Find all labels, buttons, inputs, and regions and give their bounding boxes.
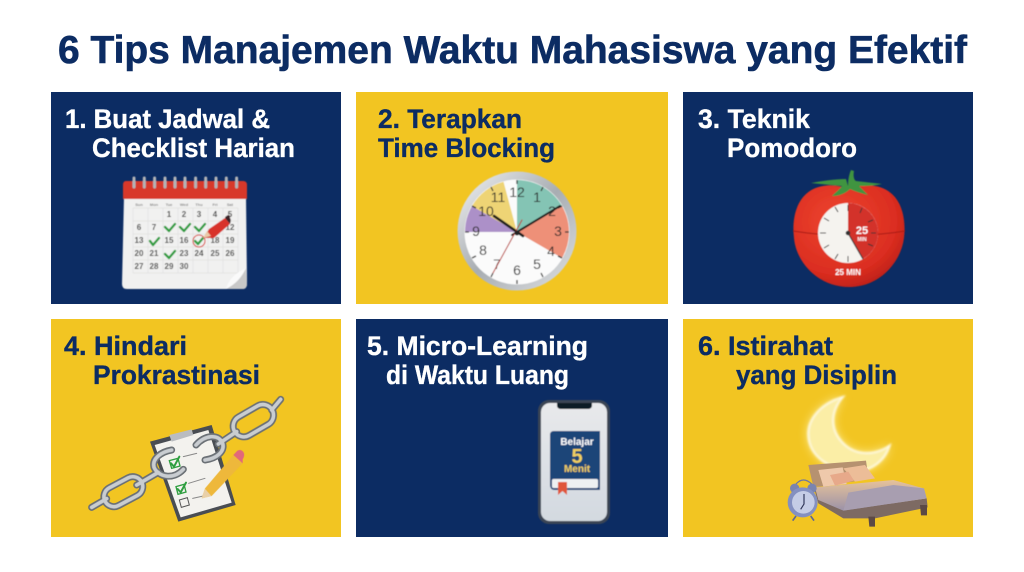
icon: smartphone with book: 5 — [571, 446, 583, 468]
panel 4 heading — [64, 331, 260, 390]
calendar dates: 18 — [211, 236, 220, 245]
bed frame — [813, 485, 928, 518]
calendar dates: 30 — [180, 262, 189, 271]
panel 5 background — [356, 319, 668, 537]
calendar dates: 28 — [150, 262, 159, 271]
calendar checkmarks — [150, 224, 205, 258]
icon: smartphone with book — [538, 400, 610, 524]
panel 6 heading: 6. Istirahat — [698, 331, 833, 361]
calendar weekday labels: Wed — [180, 202, 189, 207]
panel 6 heading — [698, 331, 897, 390]
panel 5 heading — [367, 331, 588, 390]
clock numerals: 4 — [547, 243, 555, 259]
calendar red marker — [203, 215, 231, 238]
timer label: 25 — [856, 225, 868, 237]
panel: 1 jadwal dan checklist — [51, 92, 341, 304]
panel 4 background — [51, 319, 341, 537]
book text: Belajar — [560, 437, 594, 448]
clock numerals: 3 — [554, 223, 562, 239]
panel 6 background — [683, 319, 973, 537]
calendar page curl — [226, 268, 247, 289]
clock colour wedges — [517, 180, 562, 232]
title: 6 Tips Manajemen Waktu Mahasiswa yang Efektif — [58, 29, 968, 72]
panel 4 heading: 4. Hindari — [64, 331, 187, 361]
panel 6 heading: yang Disiplin — [736, 360, 897, 390]
icon: wall clock — [458, 172, 576, 290]
panel 2 heading — [378, 104, 555, 163]
calendar dates: 27 — [135, 262, 144, 271]
panel 5 heading: 5. Micro-Learning — [367, 331, 588, 361]
bed pillows — [818, 467, 847, 487]
calendar dates — [135, 210, 235, 271]
calendar dates: 29 — [165, 262, 174, 271]
clock numerals: 12 — [509, 184, 525, 200]
calendar weekday labels: Fri — [212, 202, 218, 207]
calendar dates: 3 — [197, 210, 202, 219]
panel 2 heading: 2. Terapkan — [378, 104, 522, 134]
calendar dates: 25 — [211, 249, 220, 258]
panel: 6 istirahat — [683, 319, 973, 537]
panel 2 heading: Time Blocking — [378, 133, 555, 163]
timer dial — [818, 203, 878, 263]
calendar dates: 5 — [228, 210, 233, 219]
calendar dates: 23 — [180, 249, 189, 258]
clock numerals: 6 — [513, 262, 521, 278]
calendar dates: 20 — [135, 249, 144, 258]
clock numerals: 5 — [533, 256, 541, 272]
clipboard — [150, 425, 236, 522]
calendar dates: 24 — [195, 249, 204, 258]
clock minute ticks — [465, 180, 569, 284]
clock hands — [493, 206, 560, 273]
panel 1 heading — [65, 104, 295, 163]
chain — [92, 399, 281, 510]
panel 2 background — [356, 92, 668, 304]
clock numerals: 11 — [491, 189, 505, 205]
pencil — [202, 450, 244, 498]
clock numerals: 8 — [479, 242, 487, 258]
icon: calendar — [122, 178, 247, 289]
calendar grid — [133, 208, 238, 273]
panel: 5 micro-learning — [356, 319, 668, 537]
calendar dates: 6 — [137, 223, 142, 232]
calendar dates: 12 — [226, 223, 235, 232]
clock numerals: 1 — [533, 189, 541, 205]
panel 1 heading: Checklist Harian — [92, 133, 295, 163]
panel 4 heading: Prokrastinasi — [93, 360, 260, 390]
panel 3 heading: Pomodoro — [727, 133, 857, 163]
calendar weekday labels: Sat — [227, 202, 234, 207]
panel 3 background — [683, 92, 973, 304]
panel 3 heading: 3. Teknik — [698, 104, 811, 134]
clipboard checklist — [169, 453, 205, 507]
panel 1 heading: 1. Buat Jadwal & — [65, 104, 270, 134]
calendar dates: 21 — [150, 249, 159, 258]
calendar dates: 1 — [167, 210, 172, 219]
icon: crescent moon — [808, 397, 890, 472]
calendar dates: 16 — [180, 236, 189, 245]
calendar dates: 26 — [226, 249, 235, 258]
calendar circled date — [193, 235, 205, 247]
bed mattress — [815, 480, 927, 511]
panel: 3 pomodoro — [683, 92, 973, 304]
calendar dates: 2 — [182, 210, 187, 219]
timer unit label: MIN — [857, 237, 867, 243]
calendar dates: 4 — [213, 210, 218, 219]
icon: bed — [808, 461, 928, 527]
calendar weekday labels: Thu — [195, 202, 203, 207]
calendar dates: 15 — [165, 236, 174, 245]
calendar weekday labels: Tue — [166, 202, 173, 207]
calendar rings — [134, 178, 237, 187]
clock numerals: 9 — [472, 223, 480, 239]
clock numerals: 2 — [548, 203, 556, 219]
calendar dates: 19 — [226, 236, 235, 245]
panel 3 heading — [698, 104, 857, 163]
tomato leaves — [811, 170, 882, 196]
panel 5 heading: di Waktu Luang — [386, 360, 569, 390]
book — [550, 431, 600, 490]
icon: tomato timer — [793, 170, 905, 287]
icon: smartphone with book: Menit — [564, 464, 591, 475]
panel: 4 hindari prokrastinasi — [51, 319, 341, 537]
tomato caption: 25 MIN — [835, 268, 861, 277]
calendar dates: 13 — [135, 236, 144, 245]
icon: alarm clock — [788, 480, 818, 521]
clock numerals — [472, 184, 562, 278]
panel 1 background — [51, 92, 341, 304]
panel: 2 time blocking — [356, 92, 668, 304]
calendar dates: 7 — [152, 223, 157, 232]
calendar weekday labels — [135, 202, 234, 207]
icon: clipboard and broken chain — [92, 399, 281, 522]
calendar weekday labels: Sun — [135, 202, 143, 207]
clock numerals: 10 — [478, 203, 494, 219]
calendar weekday labels: Mon — [150, 202, 159, 207]
clock numerals: 7 — [493, 256, 501, 272]
